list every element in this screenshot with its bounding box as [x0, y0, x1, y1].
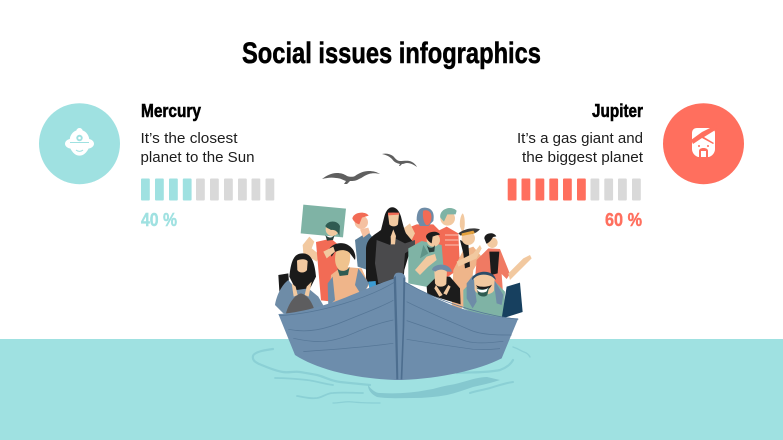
protest sign — [301, 205, 346, 237]
title: Social issues infographics — [242, 37, 541, 70]
boat shadow on water — [368, 377, 500, 398]
value: 60 %: 60 % — [605, 210, 642, 230]
icon: seagulls — [322, 154, 417, 184]
progress bar: Jupiter 60% — [508, 178, 641, 200]
boat hull — [278, 273, 518, 380]
value: 40 %: 40 % — [141, 210, 177, 230]
text: Jupiter description: It’s a gas giant and — [517, 131, 643, 147]
heading: Jupiter: Jupiter — [592, 101, 643, 121]
panel: Mercury — [39, 101, 274, 230]
bag — [502, 283, 523, 319]
icon: Jupiter circle with turbaned face — [663, 103, 744, 184]
sea background — [0, 339, 783, 440]
person: woman in black hijab at left — [275, 253, 325, 318]
water ripples — [253, 347, 530, 403]
text: Jupiter description: the biggest planet — [522, 150, 643, 166]
text: Mercury description: It’s the closest — [140, 131, 238, 147]
person: laughing man with black cap — [463, 272, 505, 320]
icon: Mercury circle with face — [39, 103, 120, 184]
person: woman in black hijab — [366, 207, 415, 293]
person: woman with black hair and coral shawl — [473, 233, 532, 299]
progress bar: Mercury 40% — [141, 178, 274, 200]
person: orange-haired man — [352, 213, 374, 270]
text: Jupiter description — [517, 131, 643, 166]
panel: Jupiter — [508, 101, 744, 230]
person: man in red vest with sign — [303, 221, 341, 302]
person: woman in orange scarf and blue hood — [403, 208, 443, 256]
text: Mercury description — [140, 131, 254, 166]
person: smiling bald man in tan shirt — [323, 243, 369, 307]
person: man in cap and life vest — [437, 208, 465, 280]
illustration: boat with people — [275, 205, 532, 380]
heading: Mercury: Mercury — [141, 101, 201, 121]
person: woman in hat — [452, 228, 482, 310]
person: man with blue beret — [427, 265, 461, 304]
person: man in teal shirt — [408, 232, 443, 288]
text: Mercury description: planet to the Sun — [140, 150, 254, 166]
